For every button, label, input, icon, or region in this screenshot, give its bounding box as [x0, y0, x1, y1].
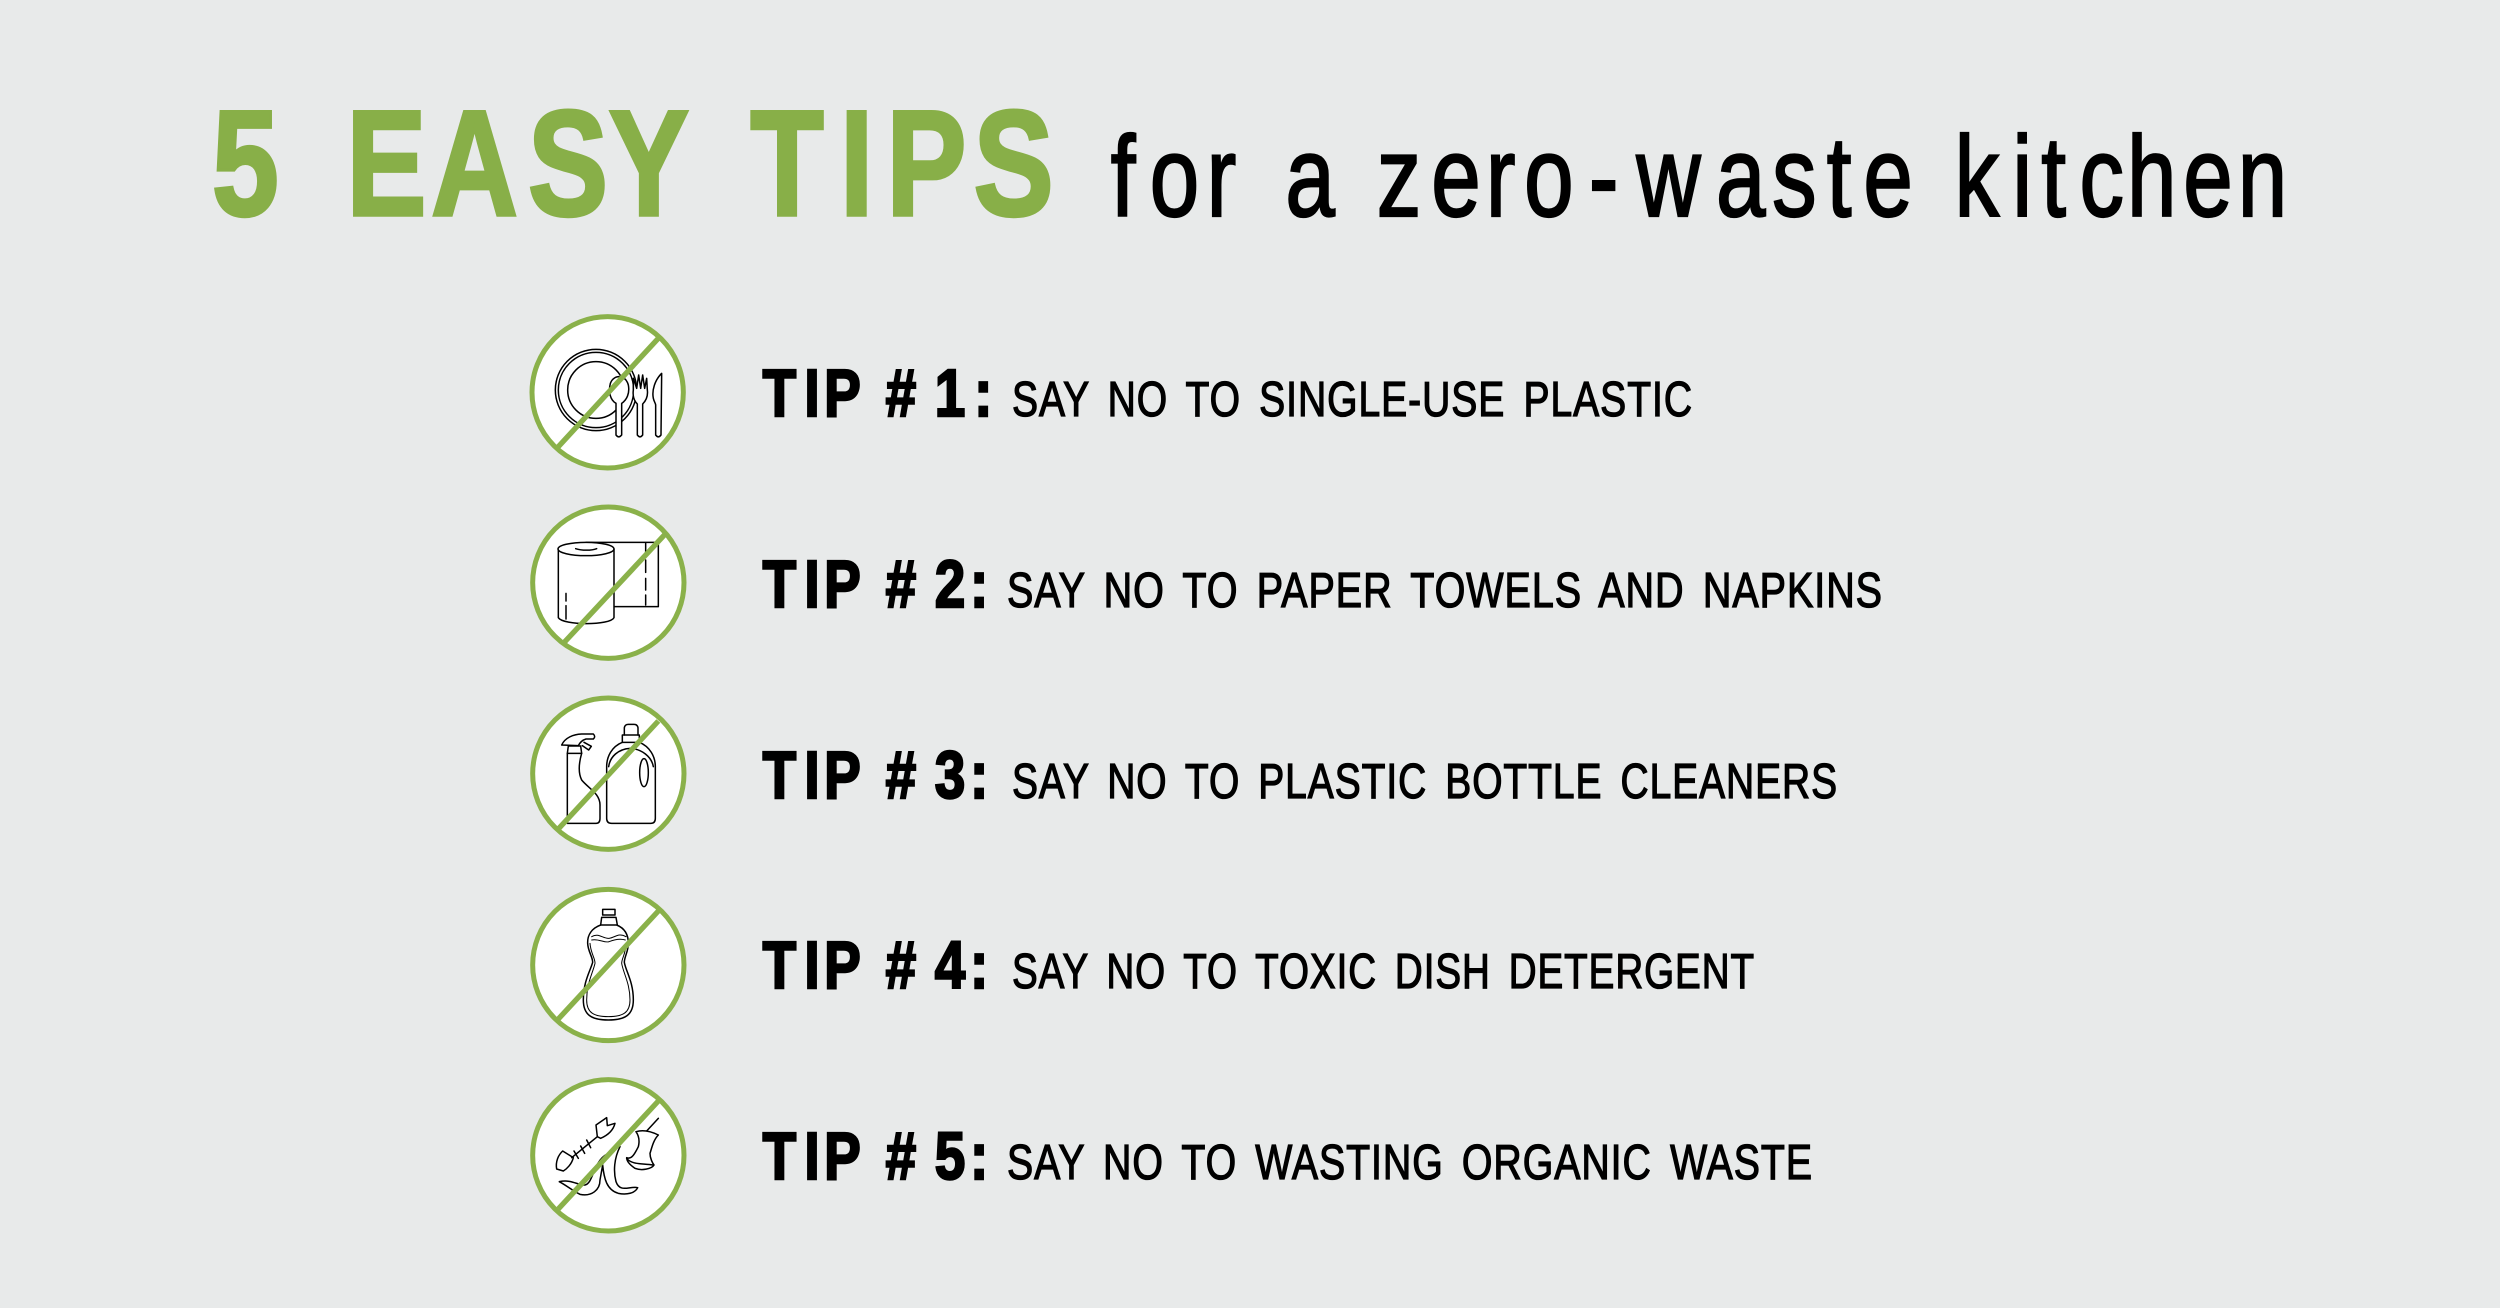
tip label 3: TIP #3: — [763, 738, 988, 812]
tip row 2 — [533, 507, 1883, 658]
tip description 1: SAY NO TO SINGLE-USE PLASTIC — [1012, 372, 1693, 427]
icon: no toxic dish detergent — [533, 889, 684, 1041]
subheading: for a zero-waste kitchen: for a zero-waste kitchen — [1111, 112, 2287, 241]
tip label 4: TIP #4: — [763, 928, 988, 1002]
icon: no wasted organic scraps — [533, 1080, 684, 1231]
tip description 4: SAY NO TO TOXIC DISH DETERGENT — [1012, 944, 1755, 999]
tip description 3: SAY NO TO PLASTIC BOTTLE CLEANERS — [1012, 754, 1838, 809]
tip row 4 — [533, 889, 1755, 1041]
tip row 1 — [532, 317, 1693, 468]
icon: no paper towels — [533, 507, 684, 658]
tip label 1: TIP #1: — [763, 356, 992, 430]
tip row 5 — [533, 1080, 1813, 1231]
tip label 2: TIP #2: — [763, 547, 988, 621]
tip description 5: SAY NO TO WASTING ORGANIC WASTE — [1007, 1135, 1813, 1190]
tip row 3 — [533, 698, 1838, 849]
title — [212, 79, 2287, 247]
tip label 5: TIP #5: — [763, 1119, 988, 1193]
heading: 5 EASY TIPS: 5 EASY TIPS — [212, 79, 1054, 247]
icon: no plastic cleaner bottles — [533, 698, 684, 849]
icon: no single-use plastic tableware — [532, 317, 683, 468]
tip description 2: SAY NO TO PAPER TOWELS AND NAPKINS — [1007, 563, 1883, 618]
